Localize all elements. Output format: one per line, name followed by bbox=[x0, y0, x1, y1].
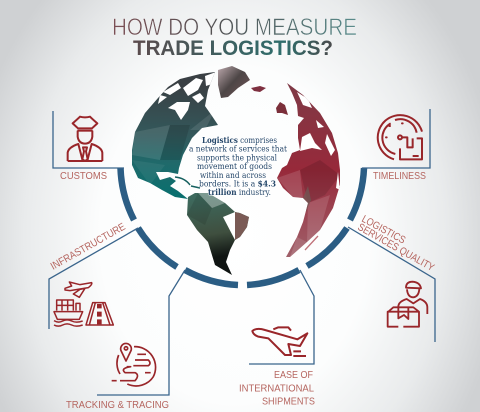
continent: Europe, Asia and Africa bbox=[277, 83, 340, 257]
panel: tracking and tracing bbox=[66, 270, 185, 411]
labels bbox=[239, 369, 315, 408]
panel: ease of international shipments bbox=[239, 270, 315, 408]
globe description: Logistics comprises bbox=[202, 135, 277, 145]
globe description bbox=[189, 135, 288, 197]
globe description: borders. It is a $4.3 bbox=[199, 178, 276, 188]
panel: infrastructure bbox=[49, 221, 138, 329]
continent: North America bbox=[132, 72, 218, 199]
globe description: trillion industry. bbox=[208, 187, 271, 197]
panel: logistics services quality bbox=[348, 213, 436, 342]
continent: Cuba and Caribbean bbox=[175, 177, 200, 188]
continent: South America bbox=[187, 193, 249, 275]
globe bbox=[125, 60, 345, 278]
labels: EASE OF bbox=[274, 369, 313, 381]
labels: INTERNATIONAL bbox=[239, 382, 314, 394]
label: INFRASTRUCTURE bbox=[49, 221, 128, 273]
continent: United Kingdom bbox=[276, 102, 288, 115]
globe description: a network of services that bbox=[189, 144, 288, 154]
title bbox=[112, 15, 357, 60]
icon: clock and parcel bbox=[378, 115, 422, 159]
title: HOW DO YOU MEASURE bbox=[112, 15, 357, 41]
label: TRACKING & TRACING bbox=[66, 399, 169, 411]
labels: SHIPMENTS bbox=[262, 396, 315, 408]
continent: Madagascar bbox=[305, 236, 318, 250]
icon: airplane bbox=[252, 327, 307, 356]
icon: location pin route bbox=[112, 343, 156, 386]
panel: customs bbox=[53, 111, 124, 182]
label: CUSTOMS bbox=[60, 170, 107, 182]
continent: Iceland bbox=[251, 86, 266, 92]
globe description: within and across bbox=[200, 170, 266, 180]
globe description: supports the physical bbox=[197, 152, 277, 162]
labels: LOGISTICS bbox=[360, 213, 407, 247]
labels: SERVICES QUALITY bbox=[356, 221, 436, 274]
icon: plane, ship and road bbox=[54, 282, 113, 326]
title: TRADE LOGISTICS? bbox=[133, 36, 333, 60]
panel: timeliness bbox=[362, 109, 430, 182]
labels bbox=[356, 213, 436, 274]
continent: Greenland bbox=[218, 66, 250, 98]
globe description: movement of goods bbox=[197, 161, 272, 171]
label: TIMELINESS bbox=[373, 170, 426, 182]
icon: customs officer bbox=[68, 117, 102, 161]
icon: delivery person with box bbox=[388, 282, 427, 327]
segmented ring bbox=[120, 168, 364, 285]
